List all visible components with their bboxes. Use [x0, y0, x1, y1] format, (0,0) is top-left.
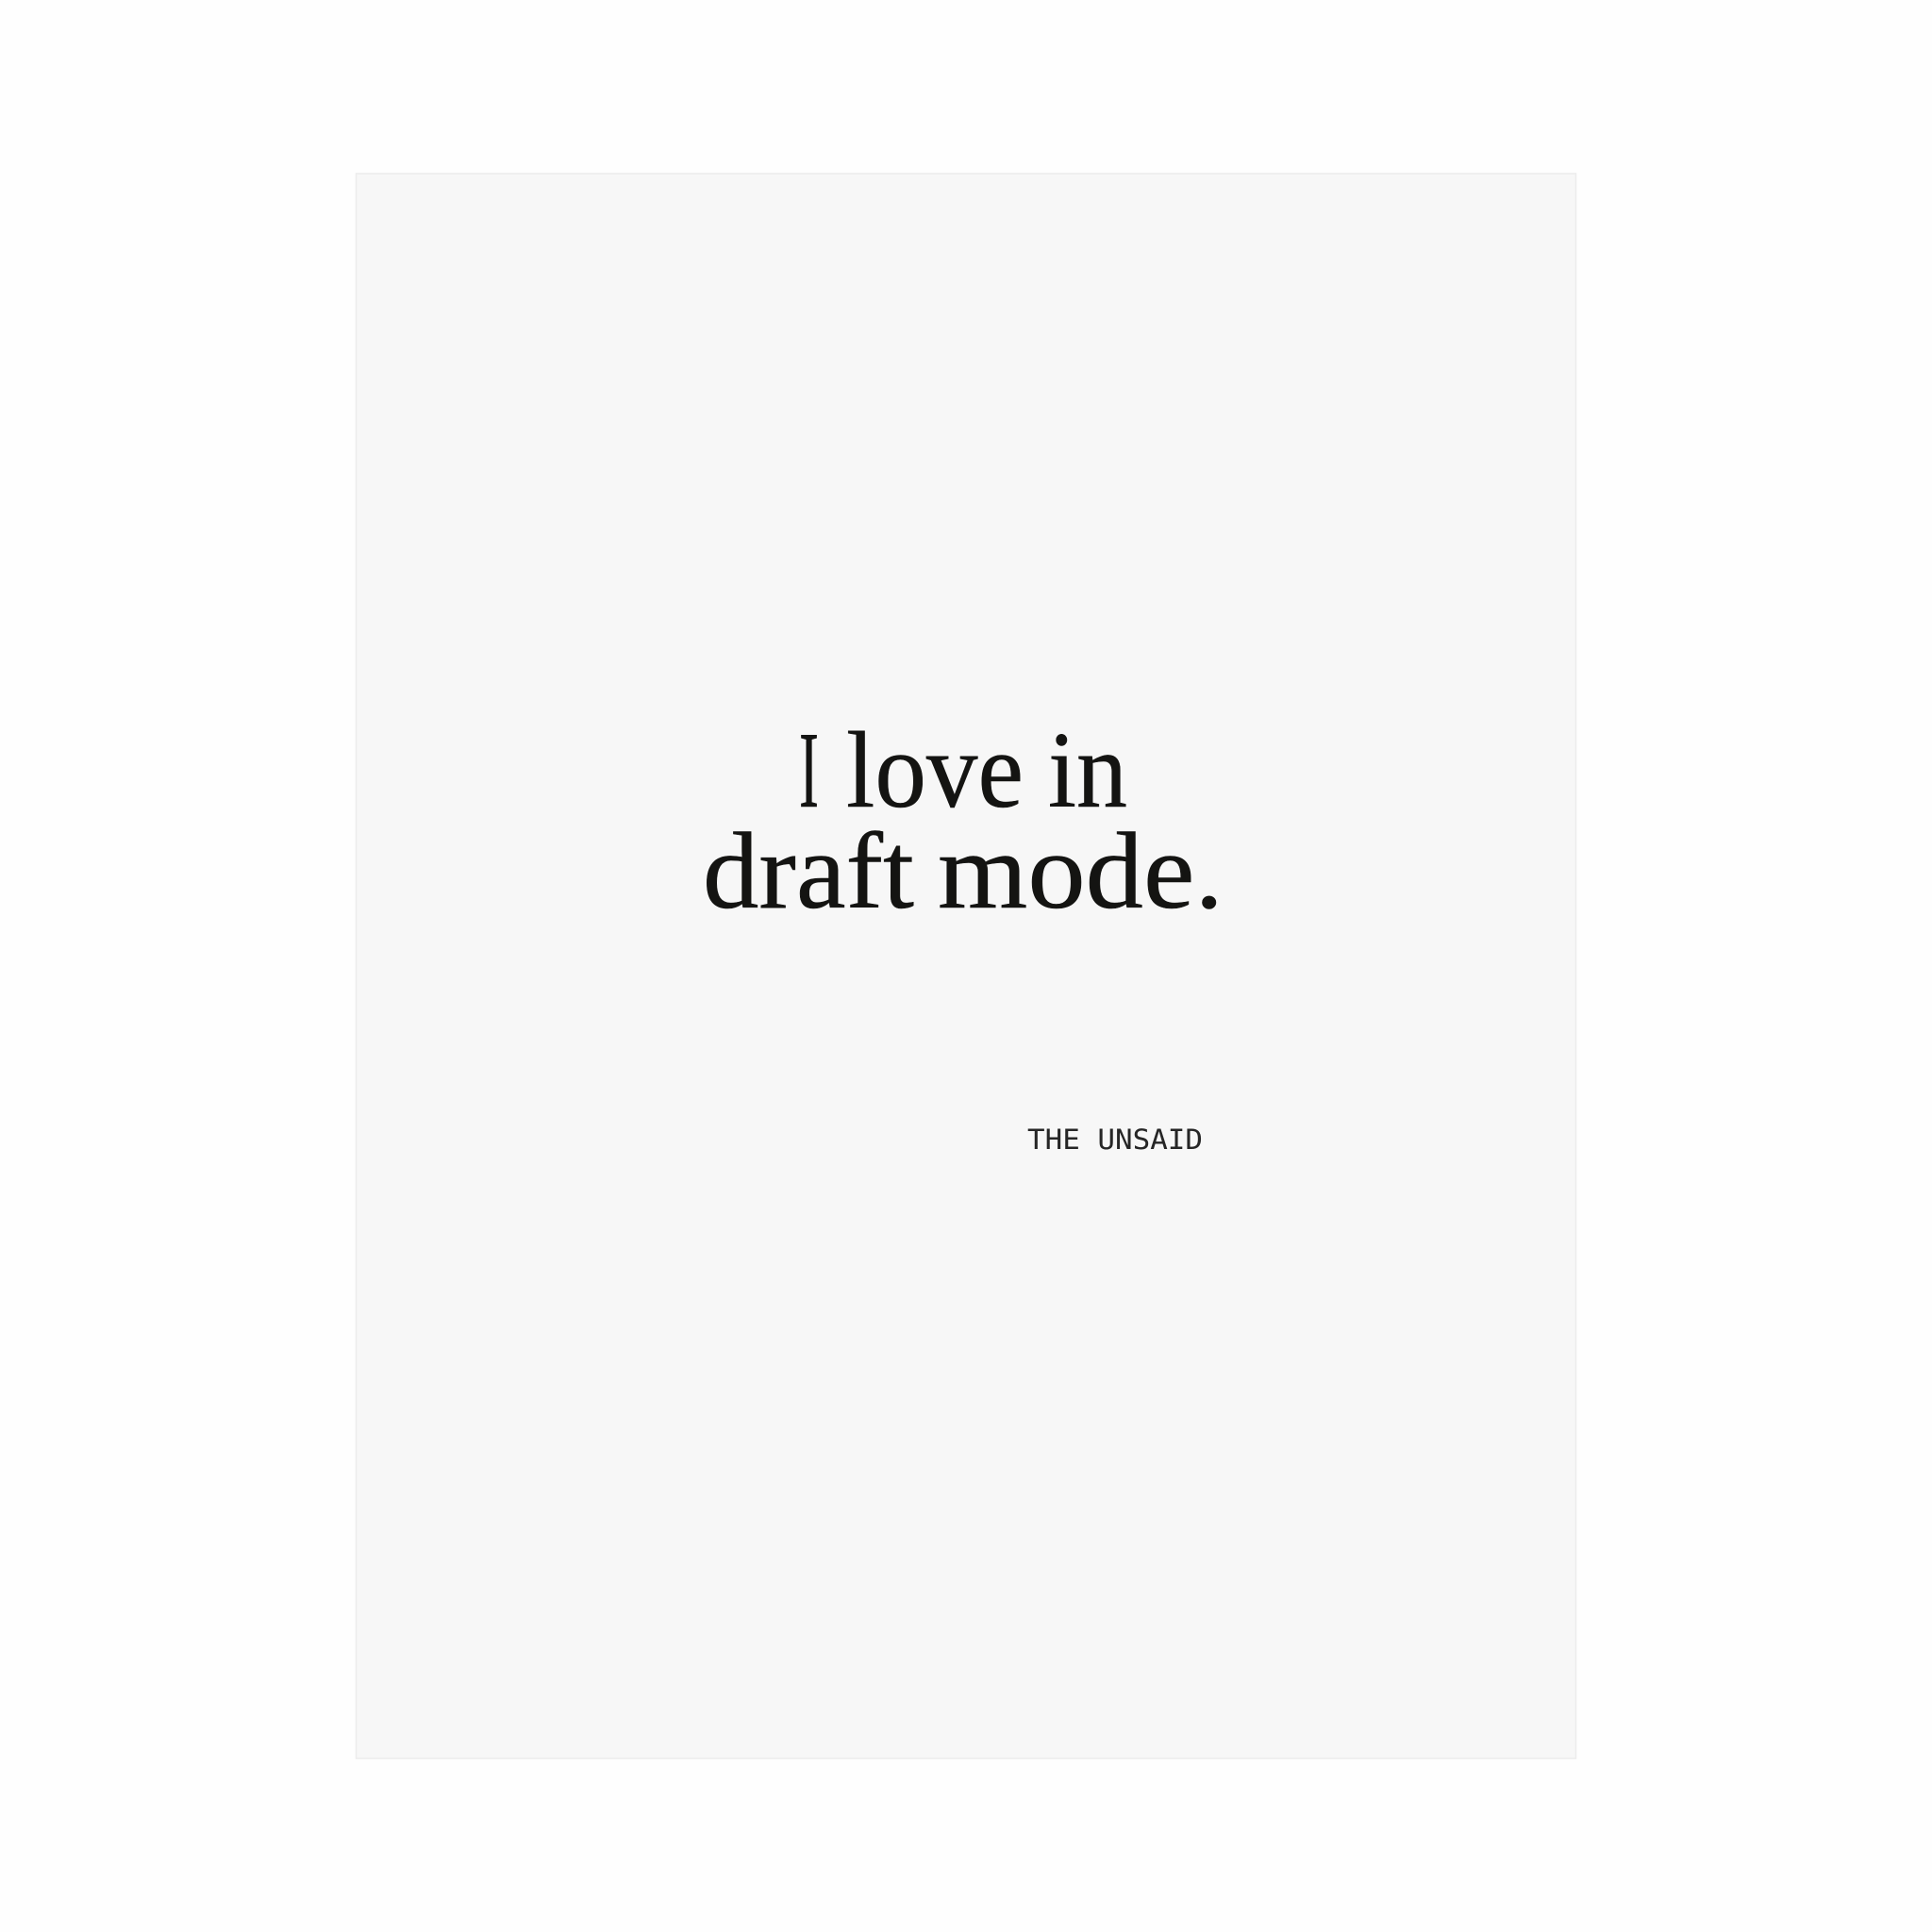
title: I love in draft mode: [703, 710, 1224, 932]
title: I love in draft mode: in: [1048, 710, 1127, 831]
title: I love in draft mode: I: [799, 710, 819, 831]
title: I love in draft mode: mode.: [938, 811, 1224, 932]
signature: THE UNSAID: THE UNSAID: [1027, 1124, 1203, 1156]
title: I love in draft mode: love: [846, 710, 1024, 831]
title: I love in draft mode: draft: [703, 811, 914, 932]
panel: poster background: [357, 174, 1575, 1758]
